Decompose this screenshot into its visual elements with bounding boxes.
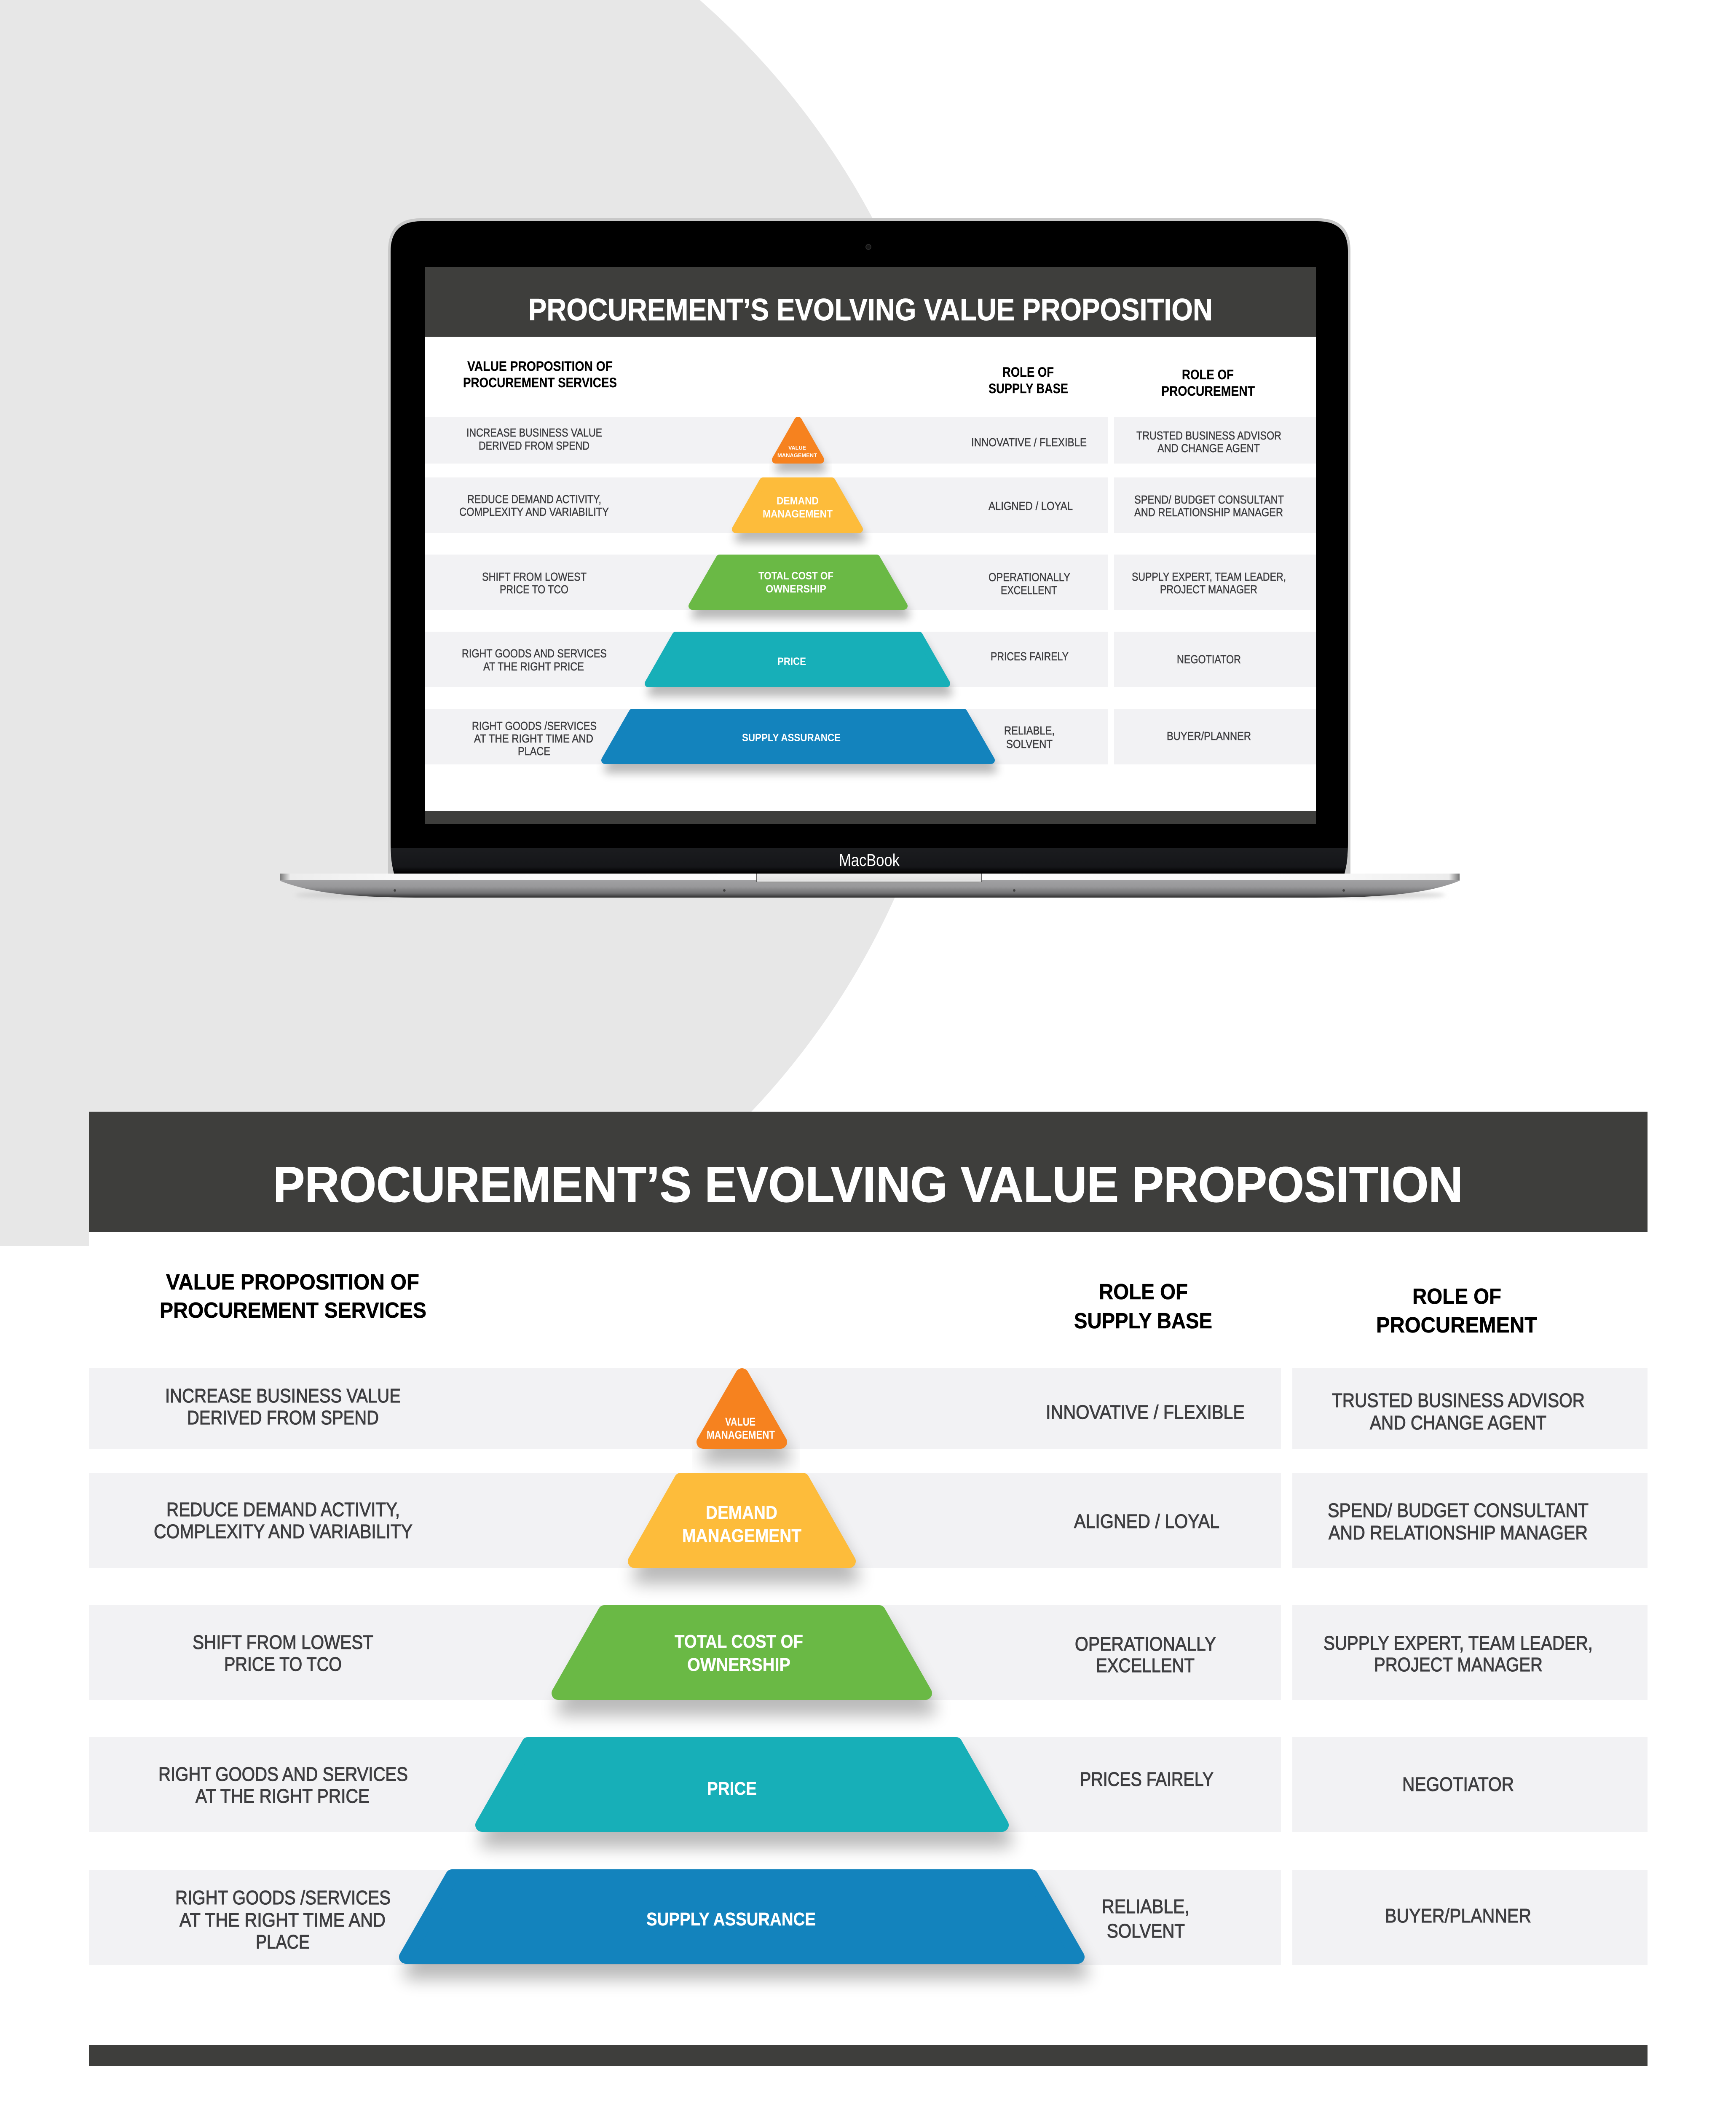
supply base column text bbox=[1046, 1401, 1245, 1942]
row 1 procurement text bbox=[1332, 1389, 1585, 1434]
screen column heading: supply base: SUPPLY BASE bbox=[989, 381, 1068, 396]
row 3 procurement text: SUPPLY EXPERT, TEAM LEADER, bbox=[1323, 1632, 1593, 1654]
screen tier: total cost of ownership: TOTAL COST OF bbox=[758, 570, 833, 582]
tier: value management bbox=[703, 1375, 785, 1458]
row 3 supply base text bbox=[1075, 1633, 1216, 1676]
row 4 supply base text: PRICES FAIRELY bbox=[1080, 1768, 1214, 1790]
main header bar bbox=[89, 1112, 1648, 1232]
row 4 procurement text: NEGOTIATOR bbox=[1402, 1773, 1514, 1795]
row 3 supply base text: EXCELLENT bbox=[1096, 1654, 1195, 1676]
screen left column text: RIGHT GOODS AND SERVICES bbox=[462, 647, 607, 660]
column heading: role of supply base: SUPPLY BASE bbox=[1074, 1309, 1212, 1333]
row 5 supply base text: SOLVENT bbox=[1107, 1920, 1185, 1942]
screen procurement column text: BUYER/PLANNER bbox=[1167, 729, 1251, 743]
column heading: role of supply base: ROLE OF bbox=[1099, 1280, 1188, 1304]
row 5 value text: AT THE RIGHT TIME AND bbox=[179, 1909, 386, 1931]
tier: supply assurance: SUPPLY ASSURANCE bbox=[646, 1909, 816, 1930]
screen left column text: REDUCE DEMAND ACTIVITY, bbox=[467, 493, 601, 506]
screen tier: supply assurance: SUPPLY ASSURANCE bbox=[742, 732, 841, 744]
row 5 supply base text: RELIABLE, bbox=[1102, 1895, 1189, 1917]
screen procurement column text bbox=[1132, 429, 1286, 743]
tier: supply assurance bbox=[406, 1876, 1082, 1973]
row 1 procurement text: TRUSTED BUSINESS ADVISOR bbox=[1332, 1389, 1585, 1411]
screen supply base column text: RELIABLE, bbox=[1004, 724, 1055, 737]
screen supply base column text: INNOVATIVE / FLEXIBLE bbox=[971, 436, 1087, 449]
tier: demand management: DEMAND bbox=[706, 1502, 777, 1523]
screen procurement column text: AND RELATIONSHIP MANAGER bbox=[1134, 506, 1283, 519]
screen supply base column text: PRICES FAIRELY bbox=[991, 650, 1069, 663]
row 2 value text: REDUCE DEMAND ACTIVITY, bbox=[166, 1498, 400, 1520]
row 3 procurement text: PROJECT MANAGER bbox=[1374, 1654, 1543, 1675]
screen left column text bbox=[459, 426, 609, 758]
main title: PROCUREMENT’S EVOLVING VALUE PROPOSITION bbox=[273, 1157, 1463, 1213]
screen procurement column text: AND CHANGE AGENT bbox=[1157, 442, 1260, 455]
screen supply base column text: SOLVENT bbox=[1006, 737, 1053, 751]
row 1 supply base text: INNOVATIVE / FLEXIBLE bbox=[1046, 1401, 1245, 1423]
tier: total cost of ownership: TOTAL COST OF bbox=[675, 1631, 803, 1652]
screen row backgrounds bbox=[425, 417, 1316, 764]
screen tier: demand management: DEMAND bbox=[777, 495, 819, 507]
screen procurement column text: TRUSTED BUSINESS ADVISOR bbox=[1136, 429, 1281, 442]
screen column heading: value proposition: PROCUREMENT SERVICES bbox=[463, 375, 617, 390]
screen left column text: PRICE TO TCO bbox=[500, 583, 568, 596]
tier: price: PRICE bbox=[707, 1778, 757, 1799]
screen supply base column text bbox=[971, 436, 1087, 751]
row 5 value text: RIGHT GOODS /SERVICES bbox=[175, 1887, 391, 1909]
footer bar bbox=[89, 2045, 1648, 2066]
tier: demand management bbox=[635, 1480, 853, 1577]
screen procurement column text: NEGOTIATOR bbox=[1177, 653, 1241, 666]
row 5 supply base text bbox=[1102, 1895, 1189, 1942]
row 1 value text bbox=[165, 1385, 401, 1429]
row 5 value text: PLACE bbox=[256, 1931, 310, 1953]
row 1 value text: DERIVED FROM SPEND bbox=[187, 1407, 379, 1429]
row 1 procurement text: AND CHANGE AGENT bbox=[1370, 1412, 1546, 1434]
screen column heading: value proposition bbox=[463, 359, 617, 390]
row 3 supply base text: OPERATIONALLY bbox=[1075, 1633, 1216, 1655]
row 3 value text: PRICE TO TCO bbox=[224, 1653, 342, 1675]
screen left column text: AT THE RIGHT PRICE bbox=[483, 660, 584, 673]
screen tier: demand management: MANAGEMENT bbox=[763, 508, 833, 520]
screen procurement column text: SPEND/ BUDGET CONSULTANT bbox=[1134, 493, 1284, 506]
column heading: role of procurement bbox=[1376, 1284, 1537, 1338]
tier: price bbox=[482, 1744, 1006, 1841]
screen column heading: procurement: ROLE OF bbox=[1182, 367, 1234, 382]
tier: demand management: MANAGEMENT bbox=[682, 1525, 801, 1546]
column heading: value proposition: VALUE PROPOSITION OF bbox=[166, 1270, 419, 1295]
screen supply base column text: OPERATIONALLY bbox=[989, 571, 1070, 584]
screen tier: supply assurance bbox=[605, 713, 994, 769]
procurement column text bbox=[1323, 1389, 1593, 1927]
row 4 value text: RIGHT GOODS AND SERVICES bbox=[158, 1763, 408, 1785]
screen left column text: COMPLEXITY AND VARIABILITY bbox=[459, 505, 609, 518]
row 4 value text: AT THE RIGHT PRICE bbox=[196, 1785, 370, 1807]
column heading: value proposition: PROCUREMENT SERVICES bbox=[160, 1298, 426, 1323]
left column text bbox=[154, 1385, 413, 1953]
column heading: role of procurement: PROCUREMENT bbox=[1376, 1313, 1537, 1338]
screen tier: value management: VALUE bbox=[788, 445, 806, 451]
screen tier: total cost of ownership bbox=[692, 558, 906, 615]
screen column heading: supply base bbox=[989, 365, 1068, 396]
row 5 procurement text: BUYER/PLANNER bbox=[1385, 1905, 1531, 1927]
screen column heading: procurement bbox=[1161, 367, 1255, 399]
screen tier: demand management bbox=[736, 481, 862, 539]
screen page bbox=[425, 267, 1316, 824]
screen tier: total cost of ownership: OWNERSHIP bbox=[766, 583, 826, 595]
laptop lid bezel bbox=[388, 218, 1350, 874]
screen tier: value management bbox=[776, 421, 823, 469]
tier: value management: MANAGEMENT bbox=[707, 1429, 775, 1441]
laptop mockup bbox=[280, 218, 1460, 898]
screen left column text: SHIFT FROM LOWEST bbox=[482, 570, 587, 583]
screen footer bar bbox=[425, 811, 1316, 824]
tier: total cost of ownership bbox=[558, 1612, 930, 1709]
webcam bbox=[866, 244, 871, 249]
laptop screen bbox=[425, 267, 1316, 824]
screen left column text: AT THE RIGHT TIME AND bbox=[474, 732, 593, 745]
column heading: role of supply base bbox=[1074, 1280, 1212, 1333]
row 3 value text: SHIFT FROM LOWEST bbox=[193, 1631, 373, 1653]
row 2 procurement text: SPEND/ BUDGET CONSULTANT bbox=[1328, 1499, 1589, 1521]
screen procurement column text: PROJECT MANAGER bbox=[1160, 583, 1257, 596]
tier: value management: VALUE bbox=[725, 1415, 755, 1428]
screen procurement column text: SUPPLY EXPERT, TEAM LEADER, bbox=[1132, 570, 1286, 583]
row 2 procurement text bbox=[1328, 1499, 1589, 1544]
row 4 value text bbox=[158, 1763, 408, 1807]
row 3 value text bbox=[193, 1631, 373, 1675]
screen tier: price bbox=[648, 635, 949, 693]
screen left column text: DERIVED FROM SPEND bbox=[479, 439, 589, 452]
tier: total cost of ownership: OWNERSHIP bbox=[687, 1654, 790, 1675]
row 2 procurement text: AND RELATIONSHIP MANAGER bbox=[1329, 1522, 1588, 1544]
screen title: PROCUREMENT’S EVOLVING VALUE PROPOSITION bbox=[528, 293, 1213, 327]
row 2 value text bbox=[154, 1498, 413, 1542]
main table panel bbox=[89, 1232, 1648, 2045]
screen left column text: PLACE bbox=[518, 745, 550, 758]
screen supply base column text: ALIGNED / LOYAL bbox=[989, 499, 1073, 512]
row 2 value text: COMPLEXITY AND VARIABILITY bbox=[154, 1520, 413, 1542]
background grey circle bbox=[0, 0, 895, 1246]
MacBook label: MacBook bbox=[839, 850, 900, 870]
screen header bar bbox=[425, 267, 1316, 337]
column heading: role of procurement: ROLE OF bbox=[1412, 1284, 1501, 1309]
row 5 value text bbox=[175, 1887, 391, 1953]
screen left column text: INCREASE BUSINESS VALUE bbox=[466, 426, 602, 439]
screen column heading: supply base: ROLE OF bbox=[1002, 365, 1054, 380]
row 3 procurement text bbox=[1323, 1632, 1593, 1675]
screen tier: value management: MANAGEMENT bbox=[777, 452, 817, 458]
table row backgrounds bbox=[89, 1368, 1648, 1965]
screen tier: price: PRICE bbox=[777, 656, 806, 667]
screen column heading: value proposition: VALUE PROPOSITION OF bbox=[467, 359, 613, 374]
screen pyramid bbox=[605, 421, 994, 769]
screen left column text: RIGHT GOODS /SERVICES bbox=[472, 719, 597, 732]
column heading: value proposition bbox=[160, 1270, 426, 1323]
laptop base bbox=[280, 874, 1460, 898]
screen supply base column text: EXCELLENT bbox=[1001, 584, 1057, 597]
screen column heading: procurement: PROCUREMENT bbox=[1161, 383, 1255, 399]
row 2 supply base text: ALIGNED / LOYAL bbox=[1074, 1510, 1219, 1532]
row 1 value text: INCREASE BUSINESS VALUE bbox=[165, 1385, 401, 1407]
pyramid chart bbox=[406, 1375, 1082, 1973]
